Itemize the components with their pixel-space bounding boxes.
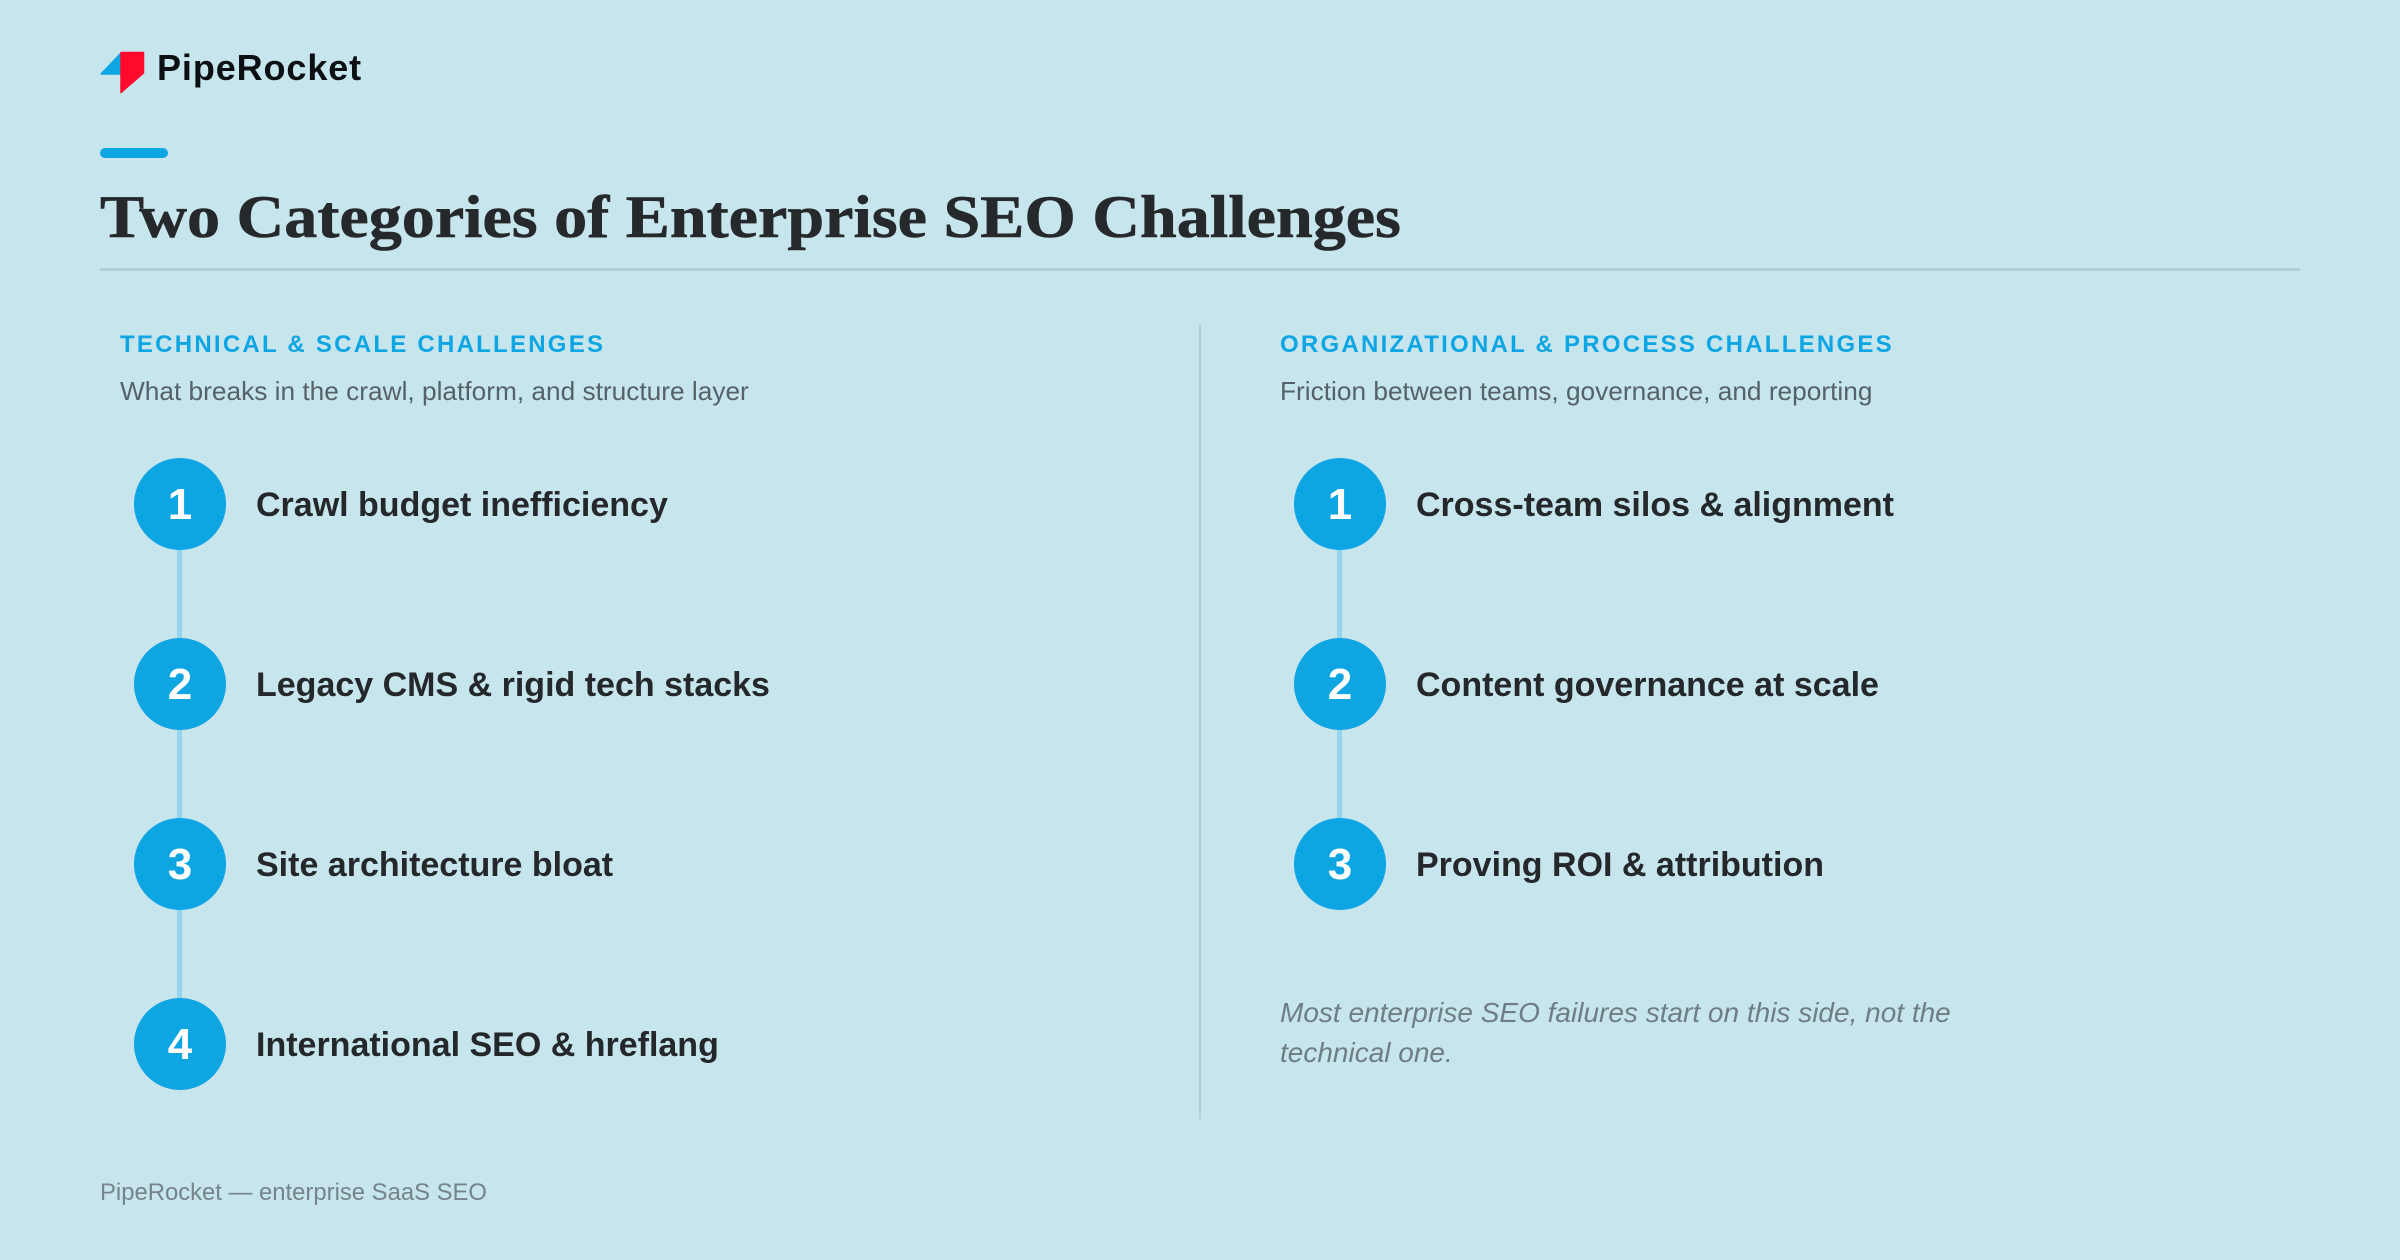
badge: 1 — [1328, 480, 1352, 529]
label: Legacy CMS & rigid tech stacks — [256, 666, 770, 704]
step 1 — [1294, 458, 1894, 550]
badge: 2 — [168, 660, 192, 709]
accent bar — [100, 148, 168, 158]
badge: 1 — [168, 480, 192, 529]
panel: organizational challenges — [1280, 331, 1951, 1068]
label: Proving ROI & attribution — [1416, 846, 1824, 884]
label: Crawl budget inefficiency — [256, 486, 668, 524]
footer: PipeRocket — enterprise SaaS SEO — [100, 1179, 487, 1206]
title rule — [100, 268, 2300, 271]
badge — [1294, 818, 1386, 910]
heading: ORGANIZATIONAL & PROCESS CHALLENGES — [1280, 331, 1894, 358]
badge — [134, 998, 226, 1090]
callout note — [1280, 997, 1951, 1068]
connector line — [177, 548, 182, 1048]
column divider — [1199, 324, 1201, 1119]
label: Site architecture bloat — [256, 846, 613, 884]
step 2 — [1294, 638, 1879, 730]
badge: 3 — [168, 840, 192, 889]
title: Two Categories of Enterprise SEO Challenges — [100, 184, 1401, 250]
logo wordmark: PipeRocket — [157, 47, 362, 88]
label: Content governance at scale — [1416, 666, 1879, 704]
label: International SEO & hreflang — [256, 1026, 719, 1064]
badge: 3 — [1328, 840, 1352, 889]
badge: 4 — [168, 1020, 192, 1069]
callout note: technical one. — [1280, 1037, 1453, 1068]
step 1 — [134, 458, 668, 550]
callout note: Most enterprise SEO failures start on this side, not the — [1280, 997, 1951, 1028]
icon: logo mark — [100, 52, 144, 94]
step 2 — [134, 638, 770, 730]
logo — [100, 47, 362, 94]
panel: technical challenges — [120, 331, 770, 1090]
badge — [134, 638, 226, 730]
badge — [1294, 638, 1386, 730]
step 3 — [1294, 818, 1824, 910]
label: Cross-team silos & alignment — [1416, 486, 1894, 524]
subheading: Friction between teams, governance, and reporting — [1280, 376, 1872, 406]
badge — [134, 818, 226, 910]
badge — [1294, 458, 1386, 550]
badge: 2 — [1328, 660, 1352, 709]
step 3 — [134, 818, 613, 910]
connector line — [1337, 548, 1342, 868]
badge — [134, 458, 226, 550]
step 4 — [134, 998, 719, 1090]
heading: TECHNICAL & SCALE CHALLENGES — [120, 331, 605, 358]
subheading: What breaks in the crawl, platform, and structure layer — [120, 376, 749, 406]
